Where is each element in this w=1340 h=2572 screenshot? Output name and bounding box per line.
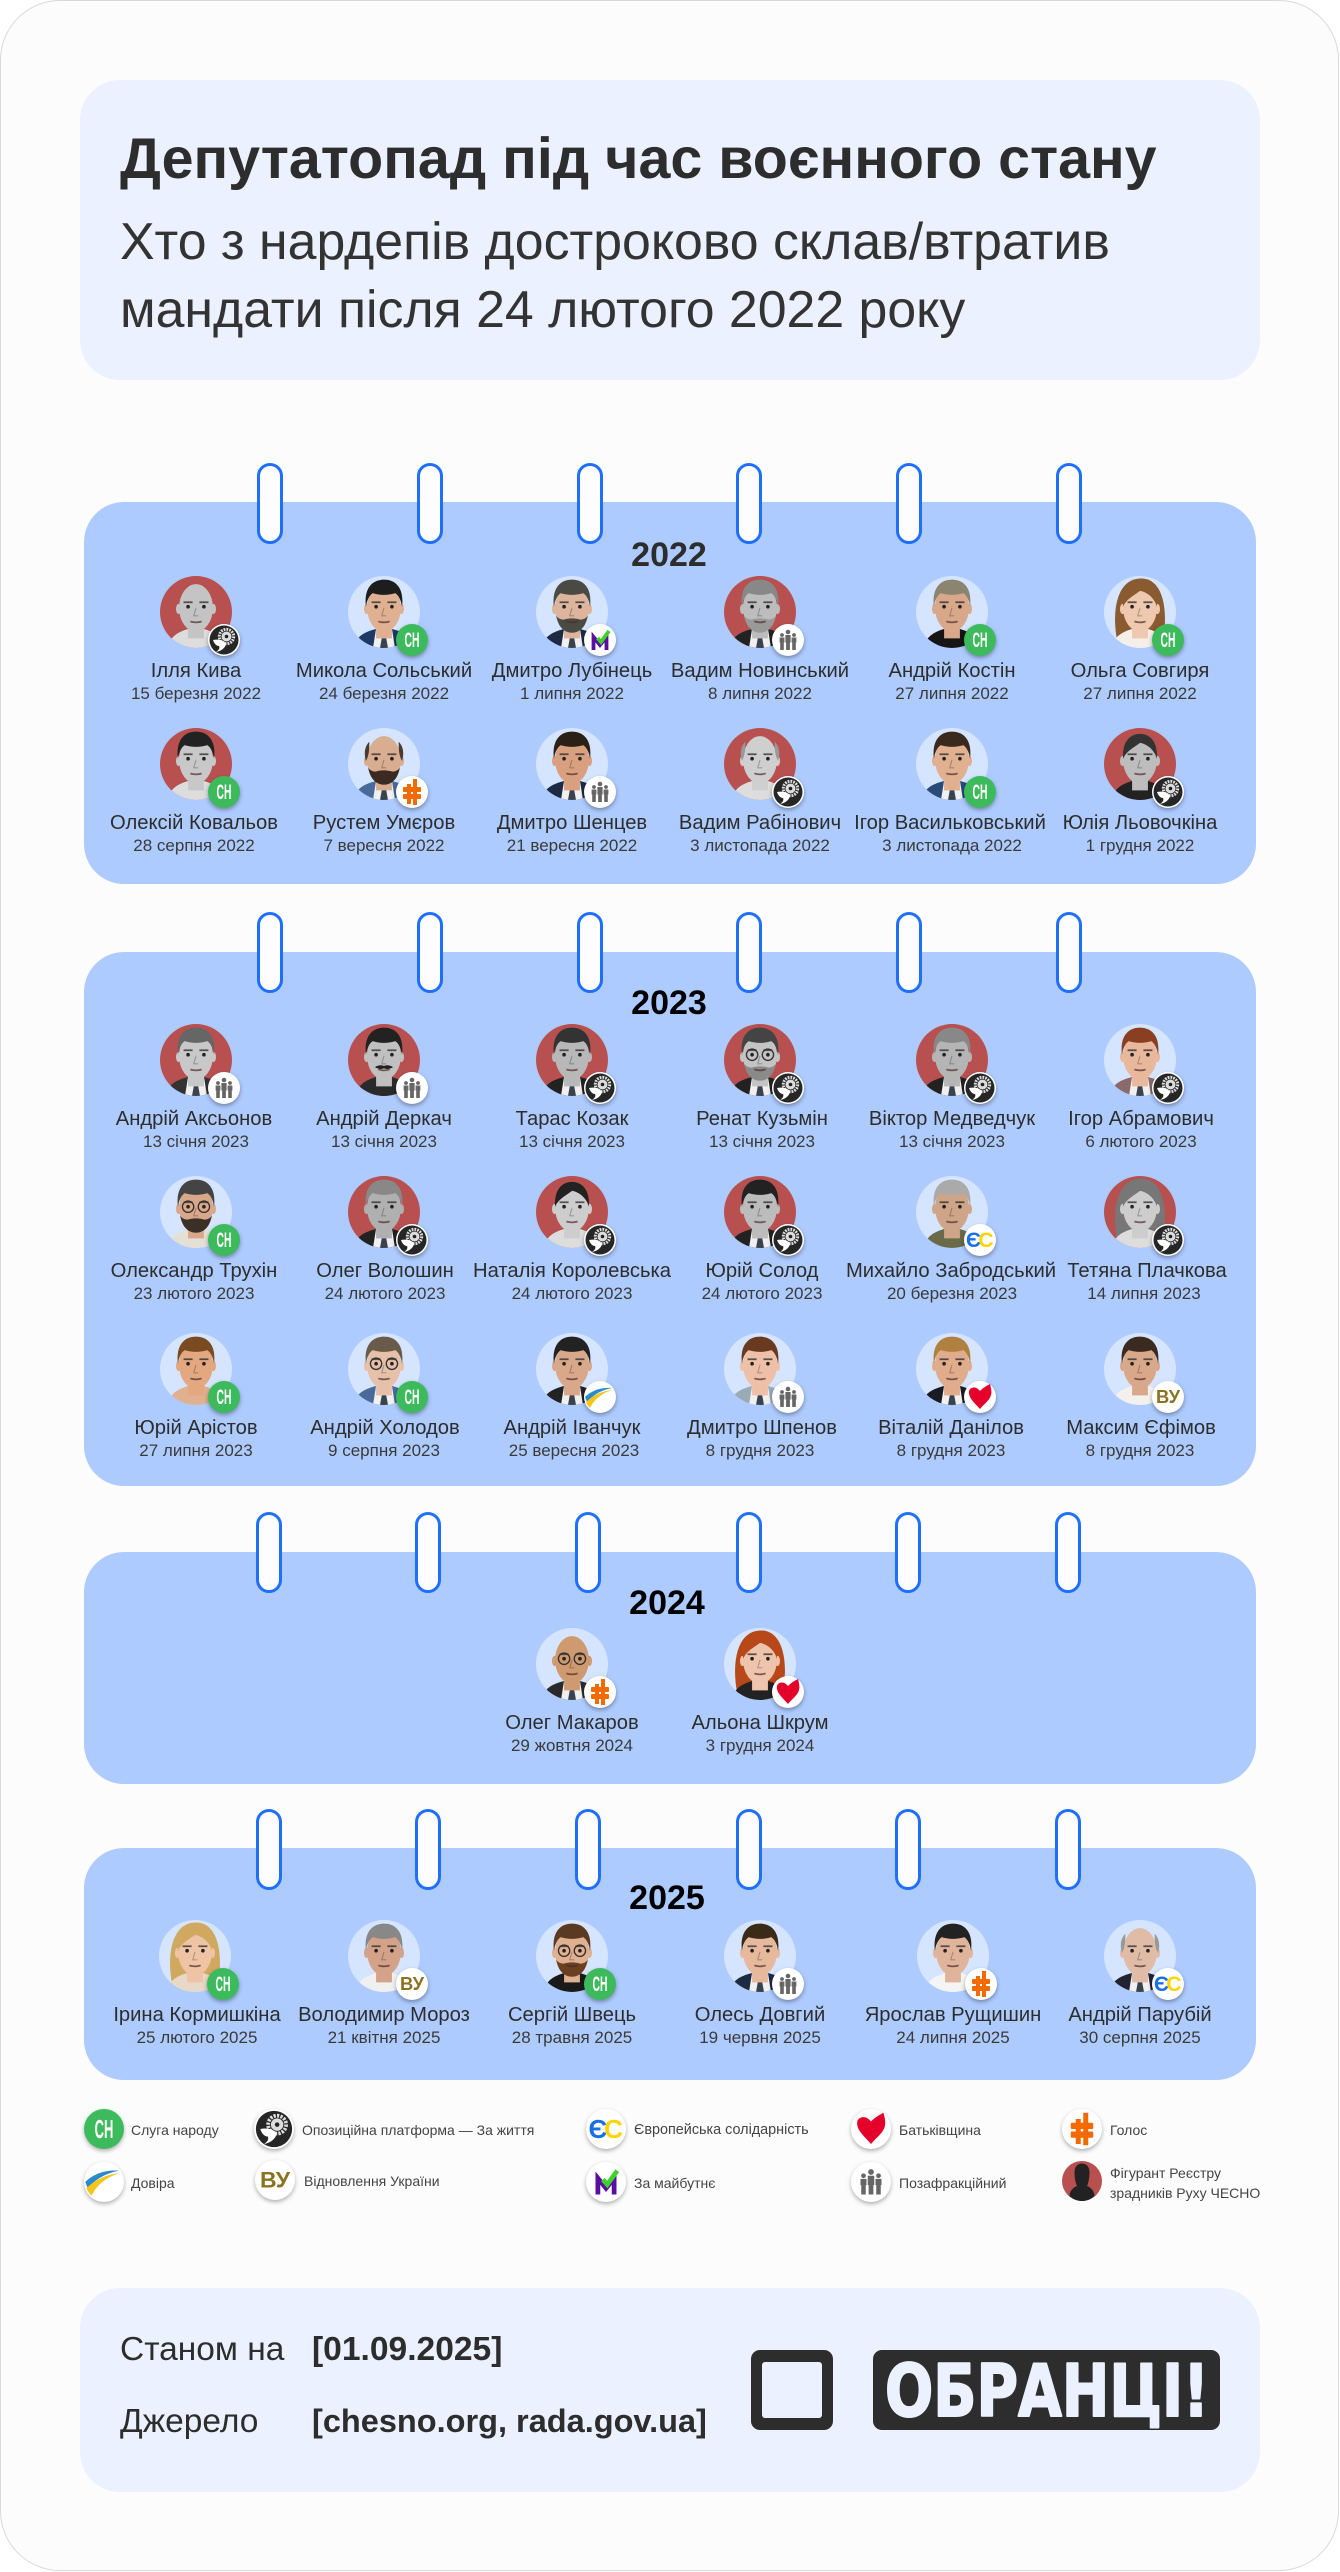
panel: 2024 — [84, 1512, 1256, 1784]
person: Олексій Ковальов — [110, 728, 278, 855]
date: 27 липня 2022 — [1083, 684, 1197, 703]
date: 6 лютого 2023 — [1085, 1132, 1197, 1151]
person: Олександр Трухін — [76, 1176, 316, 1306]
person: Сергій Швець — [452, 1920, 692, 2050]
name: Володимир Мороз — [298, 2004, 470, 2026]
party badge: Слуга народу — [394, 624, 430, 660]
portrait — [724, 1333, 796, 1405]
name: Ольга Совгиря — [1071, 660, 1209, 682]
date: 24 липня 2025 — [896, 2028, 1010, 2047]
portrait — [916, 1333, 988, 1405]
subtitle: Хто з нардепів достроково склав/втратив — [120, 212, 1110, 270]
portrait — [159, 1920, 231, 1992]
party badge: Європейська солідарність — [964, 1224, 996, 1256]
logo: square mark — [751, 2350, 833, 2430]
portrait — [1104, 728, 1176, 800]
person: Андрій Аксьонов — [76, 1024, 316, 1154]
name: Ірина Кормишкіна — [113, 2004, 281, 2026]
name: Тетяна Плачкова — [1067, 1260, 1227, 1282]
person: Ірина Кормишкіна — [75, 1920, 315, 2050]
date: 3 грудня 2024 — [706, 1736, 814, 1755]
date: 14 липня 2023 — [1087, 1284, 1201, 1303]
party badge: За майбутнє — [582, 624, 618, 660]
legend icon: Батьківщина — [851, 2109, 891, 2149]
party badge: Батьківщина — [772, 1676, 804, 1708]
name: Ігор Абрамович — [1068, 1108, 1214, 1130]
portrait — [536, 1920, 608, 1992]
portrait — [536, 576, 608, 648]
person: Юрій Арістов — [76, 1333, 316, 1463]
party badge: Європейська солідарність — [1152, 1968, 1184, 2000]
date: 13 січня 2023 — [331, 1132, 437, 1151]
person: Тарас Козак — [452, 1024, 692, 1154]
year heading 2022: 2022 — [631, 536, 707, 574]
date: 13 січня 2023 — [709, 1132, 815, 1151]
party badge: Слуга народу — [1150, 624, 1186, 660]
portrait — [536, 1333, 608, 1405]
name: Ілля Кива — [151, 660, 241, 682]
legend icon: Європейська солідарність: Є — [589, 2114, 607, 2144]
portrait — [1104, 1176, 1176, 1248]
legend icon: Слуга народу — [84, 2109, 124, 2149]
portrait — [160, 1176, 232, 1248]
name: Андрій Костін — [889, 660, 1015, 682]
party badge: Відновлення України — [1152, 1381, 1184, 1413]
name: Олег Макаров — [505, 1712, 639, 1734]
person: Михайло Забродський — [832, 1176, 1072, 1306]
portrait — [160, 576, 232, 648]
footer panel — [80, 2288, 1260, 2492]
party badge: Відновлення України: ВУ — [1156, 1387, 1181, 1407]
party badge: Європейська солідарність: С — [978, 1229, 994, 1252]
name: Альона Шкрум — [691, 1712, 829, 1734]
legend icon: Довіра — [84, 2162, 124, 2202]
person: Андрій Іванчук — [452, 1333, 692, 1463]
title: Депутатопад під час воєнного стану — [120, 127, 1157, 191]
legend label: Слуга народу — [131, 2122, 219, 2138]
party badge: Опозиційна платформа — [1150, 776, 1186, 812]
portrait — [1104, 1333, 1176, 1405]
legend icon: Опозиційна платформа — [254, 2109, 294, 2149]
person: Володимир Мороз — [264, 1920, 504, 2050]
portrait — [724, 1176, 796, 1248]
legend icon: Європейська солідарність — [586, 2109, 626, 2149]
legend label: Довіра — [131, 2175, 175, 2191]
name: Сергій Швець — [508, 2004, 636, 2026]
date: 21 квітня 2025 — [328, 2028, 440, 2047]
name: Олексій Ковальов — [110, 812, 278, 834]
portrait — [536, 728, 608, 800]
legend label: Відновлення України — [304, 2173, 440, 2189]
portrait — [348, 728, 420, 800]
binder rings 2022 — [257, 463, 1082, 544]
name: Дмитро Лубінець — [492, 660, 652, 682]
portrait — [917, 1920, 989, 1992]
portrait — [160, 1333, 232, 1405]
name: Андрій Іванчук — [504, 1416, 640, 1438]
person: Юлія Льовочкіна — [1063, 728, 1218, 855]
panel: 2022 — [84, 463, 1256, 884]
portrait — [724, 1628, 796, 1700]
name: Михайло Забродський — [846, 1260, 1056, 1282]
party badge: Позафракційний — [396, 1072, 428, 1104]
party badge: Слуга народу — [962, 776, 998, 812]
person: Ренат Кузьмін — [640, 1024, 880, 1154]
binder rings 2024 — [84, 1512, 1256, 1593]
date: 27 липня 2022 — [895, 684, 1009, 703]
party badge: Слуга народу — [208, 1224, 240, 1256]
legend — [80, 2100, 1270, 2210]
portrait — [1104, 576, 1176, 648]
source value: [chesno.org, rada.gov.ua] — [312, 2403, 707, 2439]
date: 24 лютого 2023 — [512, 1284, 632, 1303]
subtitle — [120, 212, 1110, 338]
party badge: Опозиційна платформа — [396, 1224, 428, 1256]
person: Альона Шкрум — [640, 1628, 880, 1758]
date: 13 січня 2023 — [519, 1132, 625, 1151]
legend icon: Європейська солідарність: С — [604, 2114, 623, 2144]
legend icon: Голос — [1062, 2109, 1102, 2149]
portrait — [724, 1920, 796, 1992]
name: Олександр Трухін — [111, 1260, 277, 1282]
name: Віталій Данілов — [878, 1416, 1024, 1438]
party badge: Голос — [965, 1968, 997, 2000]
person: Вадим Новинський — [671, 576, 849, 703]
party badge: Європейська солідарність: С — [1166, 1973, 1182, 1996]
name: Андрій Деркач — [316, 1108, 452, 1130]
legend icon: За майбутнє — [586, 2162, 626, 2202]
person: Дмитро Лубінець — [492, 576, 652, 703]
person: Максим Єфімов — [1020, 1333, 1260, 1463]
legend label: Голос — [1110, 2122, 1147, 2138]
date: 28 травня 2025 — [512, 2028, 632, 2047]
party badge: Голос — [584, 1676, 616, 1708]
date: 13 січня 2023 — [143, 1132, 249, 1151]
party badge: Відновлення України — [396, 1968, 428, 2000]
name: Юлія Льовочкіна — [1063, 812, 1217, 834]
party badge: Опозиційна платформа — [584, 1072, 616, 1104]
legend label: Позафракційний — [899, 2175, 1006, 2191]
legend label: Опозиційна платформа — За життя — [302, 2122, 534, 2138]
year heading 2025: 2025 — [629, 1879, 705, 1917]
party badge: Позафракційний — [772, 1381, 804, 1413]
party badge: Опозиційна платформа — [772, 1224, 804, 1256]
date: 8 грудня 2023 — [1086, 1441, 1194, 1460]
subtitle: мандати після 24 лютого 2022 року — [120, 280, 965, 338]
party badge: Опозиційна платформа — [584, 1224, 616, 1256]
portrait — [916, 1176, 988, 1248]
party badge: Довіра — [584, 1381, 616, 1413]
party badge: Слуга народу — [584, 1968, 616, 2000]
legend label: Батьківщина — [899, 2122, 981, 2138]
name: Юрій Солод — [706, 1260, 818, 1282]
date: 3 листопада 2022 — [882, 836, 1022, 855]
date: 19 червня 2025 — [699, 2028, 821, 2047]
date: 24 лютого 2023 — [325, 1284, 445, 1303]
legend icon: Відновлення України: ВУ — [260, 2168, 291, 2192]
person: Дмитро Шпенов — [640, 1333, 880, 1463]
person: Андрій Парубій — [1020, 1920, 1260, 2050]
header panel — [80, 80, 1260, 380]
party badge: Слуга народу — [962, 624, 998, 660]
person: Тетяна Плачкова — [1020, 1176, 1260, 1306]
date: 28 серпня 2022 — [133, 836, 255, 855]
date: 8 грудня 2023 — [706, 1441, 814, 1460]
party badge: Слуга народу — [208, 1381, 240, 1413]
name: Ярослав Рущишин — [865, 2004, 1041, 2026]
party badge: Слуга народу — [207, 1968, 239, 2000]
legend label: Фігурант Реєстру — [1110, 2165, 1221, 2181]
portrait — [536, 1024, 608, 1096]
person: Андрій Костін — [888, 576, 1015, 703]
name: Вадим Рабінович — [679, 812, 841, 834]
person: Юрій Солод — [640, 1176, 880, 1306]
portrait — [536, 1176, 608, 1248]
party badge: Опозиційна платформа — [772, 1072, 804, 1104]
portrait — [348, 1920, 420, 1992]
portrait — [348, 576, 420, 648]
portrait — [160, 1024, 232, 1096]
portrait — [348, 1176, 420, 1248]
person: Микола Сольський — [296, 576, 472, 703]
date: 8 грудня 2023 — [897, 1441, 1005, 1460]
person: Вадим Рабінович — [679, 728, 841, 855]
portrait — [1104, 1920, 1176, 1992]
date: 25 вересня 2023 — [509, 1441, 639, 1460]
party badge: Європейська солідарність: Є — [1154, 1973, 1169, 1996]
legend icon: Фігурант Реєстру зрадників — [1062, 2161, 1102, 2201]
legend label — [1110, 2163, 1260, 2203]
legend icon: Відновлення України — [255, 2160, 295, 2200]
person: Ілля Кива — [131, 576, 261, 703]
binder rings 2023 — [84, 912, 1256, 993]
portrait — [348, 1333, 420, 1405]
portrait — [916, 728, 988, 800]
person: Андрій Холодов — [264, 1333, 504, 1463]
portrait — [916, 1024, 988, 1096]
legend label: зрадників Руху ЧЕСНО — [1110, 2185, 1260, 2201]
date: 21 вересня 2022 — [507, 836, 637, 855]
legend icon: Позафракційний — [851, 2162, 891, 2202]
portrait — [348, 1024, 420, 1096]
date: 8 липня 2022 — [708, 684, 812, 703]
date: 29 жовтня 2024 — [511, 1736, 633, 1755]
person: Рустем Умєров — [313, 728, 455, 855]
date: 23 лютого 2023 — [134, 1284, 254, 1303]
portrait — [916, 576, 988, 648]
date: 9 серпня 2023 — [328, 1441, 440, 1460]
date: 15 березня 2022 — [131, 684, 261, 703]
name: Андрій Аксьонов — [116, 1108, 272, 1130]
year heading 2024: 2024 — [629, 1584, 705, 1622]
date: 30 серпня 2025 — [1079, 2028, 1201, 2047]
party badge: Слуга народу — [206, 776, 242, 812]
name: Олесь Довгий — [695, 2004, 825, 2026]
party badge: Слуга народу — [396, 1381, 428, 1413]
date: 7 вересня 2022 — [323, 836, 445, 855]
name: Ренат Кузьмін — [696, 1108, 828, 1130]
name: Вадим Новинський — [671, 660, 849, 682]
portrait — [724, 576, 796, 648]
party badge: Позафракційний — [772, 1968, 804, 2000]
name: Андрій Парубій — [1068, 2004, 1212, 2026]
date: 1 грудня 2022 — [1086, 836, 1194, 855]
as-of label: Станом на — [120, 2331, 284, 2368]
legend label: За майбутнє — [634, 2175, 715, 2191]
portrait — [160, 728, 232, 800]
person: Олесь Довгий — [640, 1920, 880, 2050]
party badge: Голос — [394, 776, 430, 812]
party badge: Європейська солідарність: Є — [966, 1229, 981, 1252]
party badge: Батьківщина — [964, 1381, 996, 1413]
name: Олег Волошин — [316, 1260, 454, 1282]
portrait — [536, 1628, 608, 1700]
person: Андрій Деркач — [264, 1024, 504, 1154]
date: 20 березня 2023 — [887, 1284, 1017, 1303]
date: 13 січня 2023 — [899, 1132, 1005, 1151]
source label: Джерело — [120, 2403, 258, 2440]
person: Олег Макаров — [452, 1628, 692, 1758]
name: Тарас Козак — [516, 1108, 628, 1130]
as-of date: [01.09.2025] — [312, 2331, 502, 2368]
date: 24 березня 2022 — [319, 684, 449, 703]
date: 27 липня 2023 — [139, 1441, 253, 1460]
date: 1 липня 2022 — [520, 684, 624, 703]
name: Максим Єфімов — [1066, 1416, 1216, 1438]
date: 3 листопада 2022 — [690, 836, 830, 855]
portrait — [724, 728, 796, 800]
name: Рустем Умєров — [313, 812, 455, 834]
name: Андрій Холодов — [310, 1416, 460, 1438]
portrait — [724, 1024, 796, 1096]
year heading 2023: 2023 — [631, 984, 707, 1022]
party badge: Позафракційний — [770, 624, 806, 660]
party badge: Опозиційна платформа — [1152, 1072, 1184, 1104]
name: Віктор Медведчук — [869, 1108, 1035, 1130]
name: Дмитро Шпенов — [687, 1416, 837, 1438]
person: Віталій Данілов — [832, 1333, 1072, 1463]
person: Дмитро Шенцев — [497, 728, 647, 855]
person: Ярослав Рущишин — [833, 1920, 1073, 2050]
panel: 2025 — [84, 1809, 1256, 2080]
name: Юрій Арістов — [134, 1416, 258, 1438]
party badge: Позафракційний — [582, 776, 618, 812]
binder rings 2025 — [84, 1809, 1256, 1890]
portrait — [1104, 1024, 1176, 1096]
date: 24 лютого 2023 — [702, 1284, 822, 1303]
person: Ігор Абрамович — [1020, 1024, 1260, 1154]
name: Дмитро Шенцев — [497, 812, 647, 834]
name: Ігор Васильковський — [854, 812, 1046, 834]
name: Наталія Королевська — [473, 1260, 671, 1282]
legend label: Європейська солідарність — [634, 2122, 809, 2138]
panel: 2023 — [84, 912, 1256, 1486]
party badge: Опозиційна платформа — [770, 776, 806, 812]
party badge: Опозиційна платформа — [964, 1072, 996, 1104]
date: 25 лютого 2025 — [137, 2028, 257, 2047]
party badge: Позафракційний — [208, 1072, 240, 1104]
party badge: Опозиційна платформа — [206, 624, 242, 660]
name: Микола Сольський — [296, 660, 472, 682]
person: Ольга Совгиря — [1071, 576, 1209, 703]
person: Віктор Медведчук — [832, 1024, 1072, 1154]
party badge: Опозиційна платформа — [1152, 1224, 1184, 1256]
party badge: Відновлення України: ВУ — [400, 1974, 425, 1994]
person: Олег Волошин — [264, 1176, 504, 1306]
person: Наталія Королевська — [452, 1176, 692, 1306]
person: Ігор Васильковський — [854, 728, 1046, 855]
